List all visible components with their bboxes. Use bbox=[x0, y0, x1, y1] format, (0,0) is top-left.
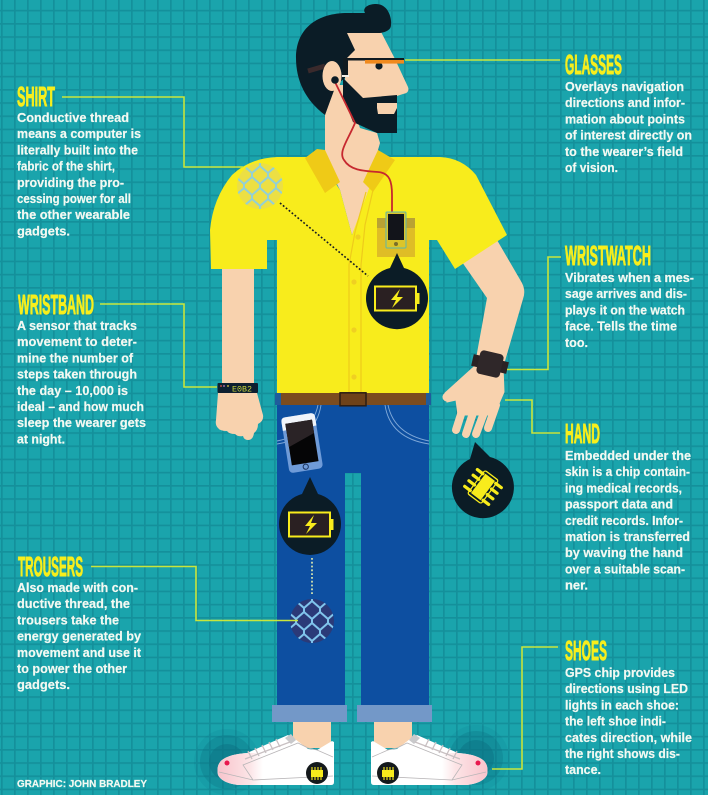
right shoe signal rings bbox=[443, 725, 509, 791]
left shoe signal rings bbox=[194, 729, 260, 795]
panel: hand bbox=[565, 418, 691, 593]
text: trousers: gadgets. bbox=[17, 677, 70, 692]
credit: GRAPHIC: JOHN BRADLEY bbox=[17, 779, 147, 790]
trouser conductive thread patch bbox=[290, 599, 334, 643]
text: glasses: of vision. bbox=[565, 160, 618, 175]
leader line: shirt bbox=[62, 97, 243, 167]
dotted connector trousers bbox=[311, 558, 313, 595]
wristband: E0B2 bbox=[232, 384, 252, 394]
right hand bbox=[445, 365, 504, 434]
text: wristwatch: plays it on the watch bbox=[565, 302, 685, 317]
panel: wristwatch bbox=[565, 240, 694, 350]
panel: wristband bbox=[17, 289, 146, 446]
text: wristband: sleep the wearer gets bbox=[17, 415, 146, 430]
text: trousers: ductive thread, the bbox=[17, 596, 130, 611]
text: wristwatch: too. bbox=[565, 335, 588, 350]
chest pocket bbox=[377, 218, 415, 257]
leader line: glasses bbox=[405, 59, 560, 61]
panel: trousers bbox=[17, 551, 142, 692]
trouser cuffs bbox=[272, 705, 432, 722]
panel: trousers: TROUSERS bbox=[18, 551, 83, 582]
leader line: wristwatch bbox=[507, 257, 561, 370]
text: shoes bbox=[565, 665, 692, 777]
text: trousers: Also made with con- bbox=[17, 580, 138, 595]
text: trousers: trousers take the bbox=[17, 612, 119, 627]
text: shirt: literally built into the bbox=[17, 142, 138, 157]
wristband bbox=[218, 383, 258, 394]
text: hand: by waving the hand bbox=[565, 545, 683, 560]
text: wristband: steps taken through bbox=[17, 367, 137, 382]
text: shirt: Conductive thread bbox=[17, 110, 129, 125]
text: hand: over a suitable scan- bbox=[565, 561, 685, 576]
text: wristwatch bbox=[565, 270, 694, 350]
text: shirt bbox=[17, 110, 141, 238]
text: shirt: gadgets. bbox=[17, 223, 70, 238]
dotted connector shirt bbox=[280, 203, 368, 276]
yellow shirt bbox=[210, 157, 507, 393]
figure: man wearing gadgets bbox=[194, 4, 524, 795]
trouser phone bbox=[281, 413, 323, 473]
text: shoes: cates direction, while bbox=[565, 730, 692, 745]
trousers bbox=[277, 405, 429, 705]
text: wristband: movement to deter- bbox=[17, 334, 137, 349]
text: glasses bbox=[565, 79, 692, 175]
shirt buttons bbox=[351, 234, 361, 380]
text: wristband: at night. bbox=[17, 431, 65, 446]
neck and chest skin bbox=[325, 85, 380, 235]
right shoe bbox=[371, 734, 488, 785]
text: trousers: movement and use it bbox=[17, 645, 142, 660]
belt bbox=[275, 393, 431, 406]
text: trousers: to power the other bbox=[17, 661, 127, 676]
text: hand: passport data and bbox=[565, 497, 673, 512]
text: shoes: the left shoe indi- bbox=[565, 714, 666, 729]
text: wristwatch: sage arrives and dis- bbox=[565, 286, 687, 301]
panel: hand: HAND bbox=[565, 418, 600, 449]
panel: shoes: SHOES bbox=[565, 635, 607, 666]
text: glasses: directions and infor- bbox=[565, 95, 685, 110]
text: trousers bbox=[17, 580, 142, 692]
leader line: shoes bbox=[492, 647, 558, 769]
text: shirt: fabric of the shirt, bbox=[17, 159, 115, 174]
text: shoes: directions using LED bbox=[565, 681, 688, 696]
text: glasses: of interest directly on bbox=[565, 128, 692, 143]
text: wristband: mine the number of bbox=[17, 350, 134, 365]
battery bubble trousers bbox=[279, 477, 341, 555]
music player bbox=[386, 212, 406, 248]
text: shoes: lights in each shoe: bbox=[565, 697, 679, 712]
text: shoes: tance. bbox=[565, 762, 601, 777]
text: wristband: the day – 10,000 is bbox=[17, 383, 128, 398]
shoulder conductive thread patch bbox=[237, 163, 283, 209]
text: hand: mation is transferred bbox=[565, 529, 690, 544]
panel: shirt bbox=[17, 81, 141, 238]
text: shirt: cessing power for all bbox=[17, 191, 131, 206]
ankles bbox=[293, 722, 412, 748]
text: shirt: means a computer is bbox=[17, 126, 141, 141]
wristwatch bbox=[470, 348, 510, 380]
left hand bbox=[216, 393, 263, 440]
battery bubble chest bbox=[366, 253, 428, 329]
text: wristband: A sensor that tracks bbox=[17, 318, 137, 333]
text: hand: skin is a chip contain- bbox=[565, 464, 690, 479]
chip bubble hand bbox=[452, 442, 514, 518]
text: hand bbox=[565, 448, 691, 593]
text: shirt: the other wearable bbox=[17, 207, 130, 222]
text: hand: Embedded under the bbox=[565, 448, 691, 463]
text: wristwatch: face. Tells the time bbox=[565, 319, 677, 334]
left shoe bbox=[218, 734, 334, 785]
text: wristwatch: Vibrates when a mes- bbox=[565, 270, 694, 285]
text: glasses: Overlays navigation bbox=[565, 79, 684, 94]
left arm bbox=[222, 265, 254, 385]
text: wristband: ideal – and how much bbox=[17, 399, 144, 414]
shirt collar bbox=[305, 149, 395, 193]
text: hand: ing medical records, bbox=[565, 480, 682, 495]
text: shoes: GPS chip provides bbox=[565, 665, 675, 680]
leader line: wristband bbox=[100, 304, 217, 387]
text: trousers: energy generated by bbox=[17, 629, 142, 644]
text: glasses: to the wearer’s field bbox=[565, 144, 683, 159]
earphone cord bbox=[331, 76, 392, 212]
panel: wristband: WRISTBAND bbox=[18, 289, 94, 320]
text: hand: credit records. Infor- bbox=[565, 513, 683, 528]
panel: shirt: SHIRT bbox=[17, 81, 55, 112]
panel: glasses bbox=[565, 49, 692, 175]
text: glasses: mation about points bbox=[565, 111, 685, 126]
panel: shoes bbox=[565, 635, 692, 777]
trouser pockets bbox=[277, 405, 429, 444]
text: wristband bbox=[17, 318, 146, 446]
text: shoes: the right shows dis- bbox=[565, 746, 680, 761]
text: hand: ner. bbox=[565, 578, 588, 593]
head: hair, face and beard bbox=[296, 4, 408, 133]
glasses bbox=[342, 58, 404, 77]
right arm bbox=[462, 240, 524, 368]
text: shirt: providing the pro- bbox=[17, 175, 124, 190]
leader line: trousers bbox=[91, 566, 298, 620]
shirt placket bbox=[349, 190, 373, 393]
panel: glasses: GLASSES bbox=[565, 49, 622, 80]
leader line: hand bbox=[505, 400, 560, 433]
